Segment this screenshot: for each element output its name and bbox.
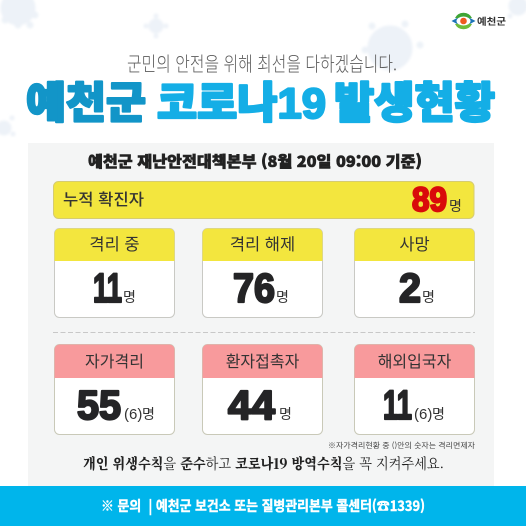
footer bar: ※ 문의 | 예천군 보건소 또는 질병관리본부 콜센터(☎1339): [101, 496, 425, 516]
title: 예천군: [26, 80, 146, 128]
total confirmed bar: 명: [449, 196, 462, 216]
logo: Yecheon-gun: 예천군: [477, 14, 506, 28]
panel heading: 예천군 재난안전대책본부 (8월 20일 09:00 기준): [88, 150, 422, 172]
card: deaths: 2: [399, 265, 421, 311]
title: 코로나19: [157, 80, 326, 128]
card: deaths: [354, 228, 474, 318]
card: in quarantine: 11: [93, 265, 122, 311]
card: released: 격리 해제: [230, 231, 295, 255]
card: overseas arrivals: 11: [383, 382, 412, 428]
card: patient contacts: 44: [228, 382, 275, 428]
card: overseas arrivals: (6): [414, 406, 432, 423]
card: in quarantine: 명: [123, 287, 136, 307]
title: [26, 80, 495, 128]
footer bar: [0, 486, 526, 526]
card: in quarantine: 격리 중: [89, 231, 140, 255]
card: overseas arrivals: 해외입국자: [378, 348, 452, 372]
total confirmed bar: [54, 181, 474, 219]
card: self quarantine: 자가격리: [85, 348, 144, 372]
card: released: 명: [276, 287, 289, 307]
card: patient contacts: 명: [279, 404, 292, 424]
card: patient contacts: [202, 344, 322, 434]
card: self quarantine: 55: [77, 382, 121, 428]
logo: Yecheon-gun: [452, 13, 506, 29]
total confirmed bar: 누적 확진자: [63, 186, 144, 210]
card: self quarantine: [54, 344, 174, 434]
card: overseas arrivals: 명: [432, 404, 445, 424]
card: self quarantine: (6): [124, 406, 142, 423]
card: in quarantine: [54, 228, 174, 318]
card: released: 76: [233, 265, 275, 311]
card: self quarantine: 명: [142, 404, 155, 424]
card: deaths: 명: [422, 287, 435, 307]
card: deaths: 사망: [399, 231, 430, 255]
card: patient contacts: 환자접촉자: [226, 348, 300, 372]
total confirmed bar: 89: [412, 181, 447, 219]
card: overseas arrivals: [354, 344, 474, 434]
hygiene notice: 개인 위생수칙을 준수하고 코로나19 방역수칙을 꼭 지켜주세요.: [83, 453, 444, 474]
background virus decorations: [0, 0, 526, 136]
card: released: [202, 228, 322, 318]
footnote: ※자가격리현황 중 ()안의 숫자는 격리면제자: [328, 440, 475, 451]
slogan: 군민의 안전을 위해 최선을 다하겠습니다.: [127, 48, 397, 77]
panel: status: [28, 143, 494, 486]
title: 발생현황: [334, 80, 495, 128]
